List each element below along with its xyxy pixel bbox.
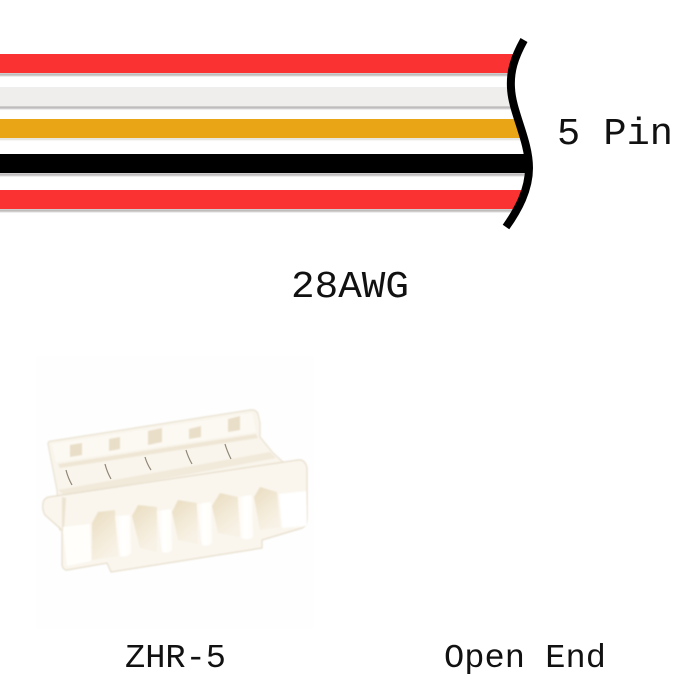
rear lower shading above flange: [58, 452, 276, 497]
label: open end: Open End: [444, 640, 606, 677]
label: connector type: ZHR-5: [125, 640, 226, 677]
wire 2: white: [0, 87, 530, 106]
front slots: [92, 487, 280, 560]
right end block highlight: [279, 491, 307, 528]
rear ledge shading: [58, 434, 258, 468]
left end block highlight: [63, 524, 91, 566]
rear body: [48, 410, 283, 530]
wire ribbon: five coloured wires with a break line: [0, 40, 560, 227]
rear slits: [66, 444, 231, 485]
rear top windows: [70, 416, 240, 457]
break line: [506, 40, 529, 227]
label: pin count: 5 Pin: [557, 113, 673, 156]
label: wire gauge: 28AWG: [291, 266, 409, 309]
front pins: [115, 495, 253, 557]
wire 4: black: [0, 154, 530, 173]
wire 1: red: [0, 54, 530, 73]
connector: ZHR-5 white housing: [35, 355, 315, 630]
rear top ledge highlight: [52, 413, 256, 462]
photo background tint: [35, 355, 315, 630]
flange left edge shading: [62, 497, 66, 530]
wire shadows: [0, 73, 525, 212]
mask right of break: [506, 40, 560, 227]
wire 5: red: [0, 190, 530, 209]
wire 3: orange: [0, 119, 530, 138]
front flange: [43, 460, 307, 572]
